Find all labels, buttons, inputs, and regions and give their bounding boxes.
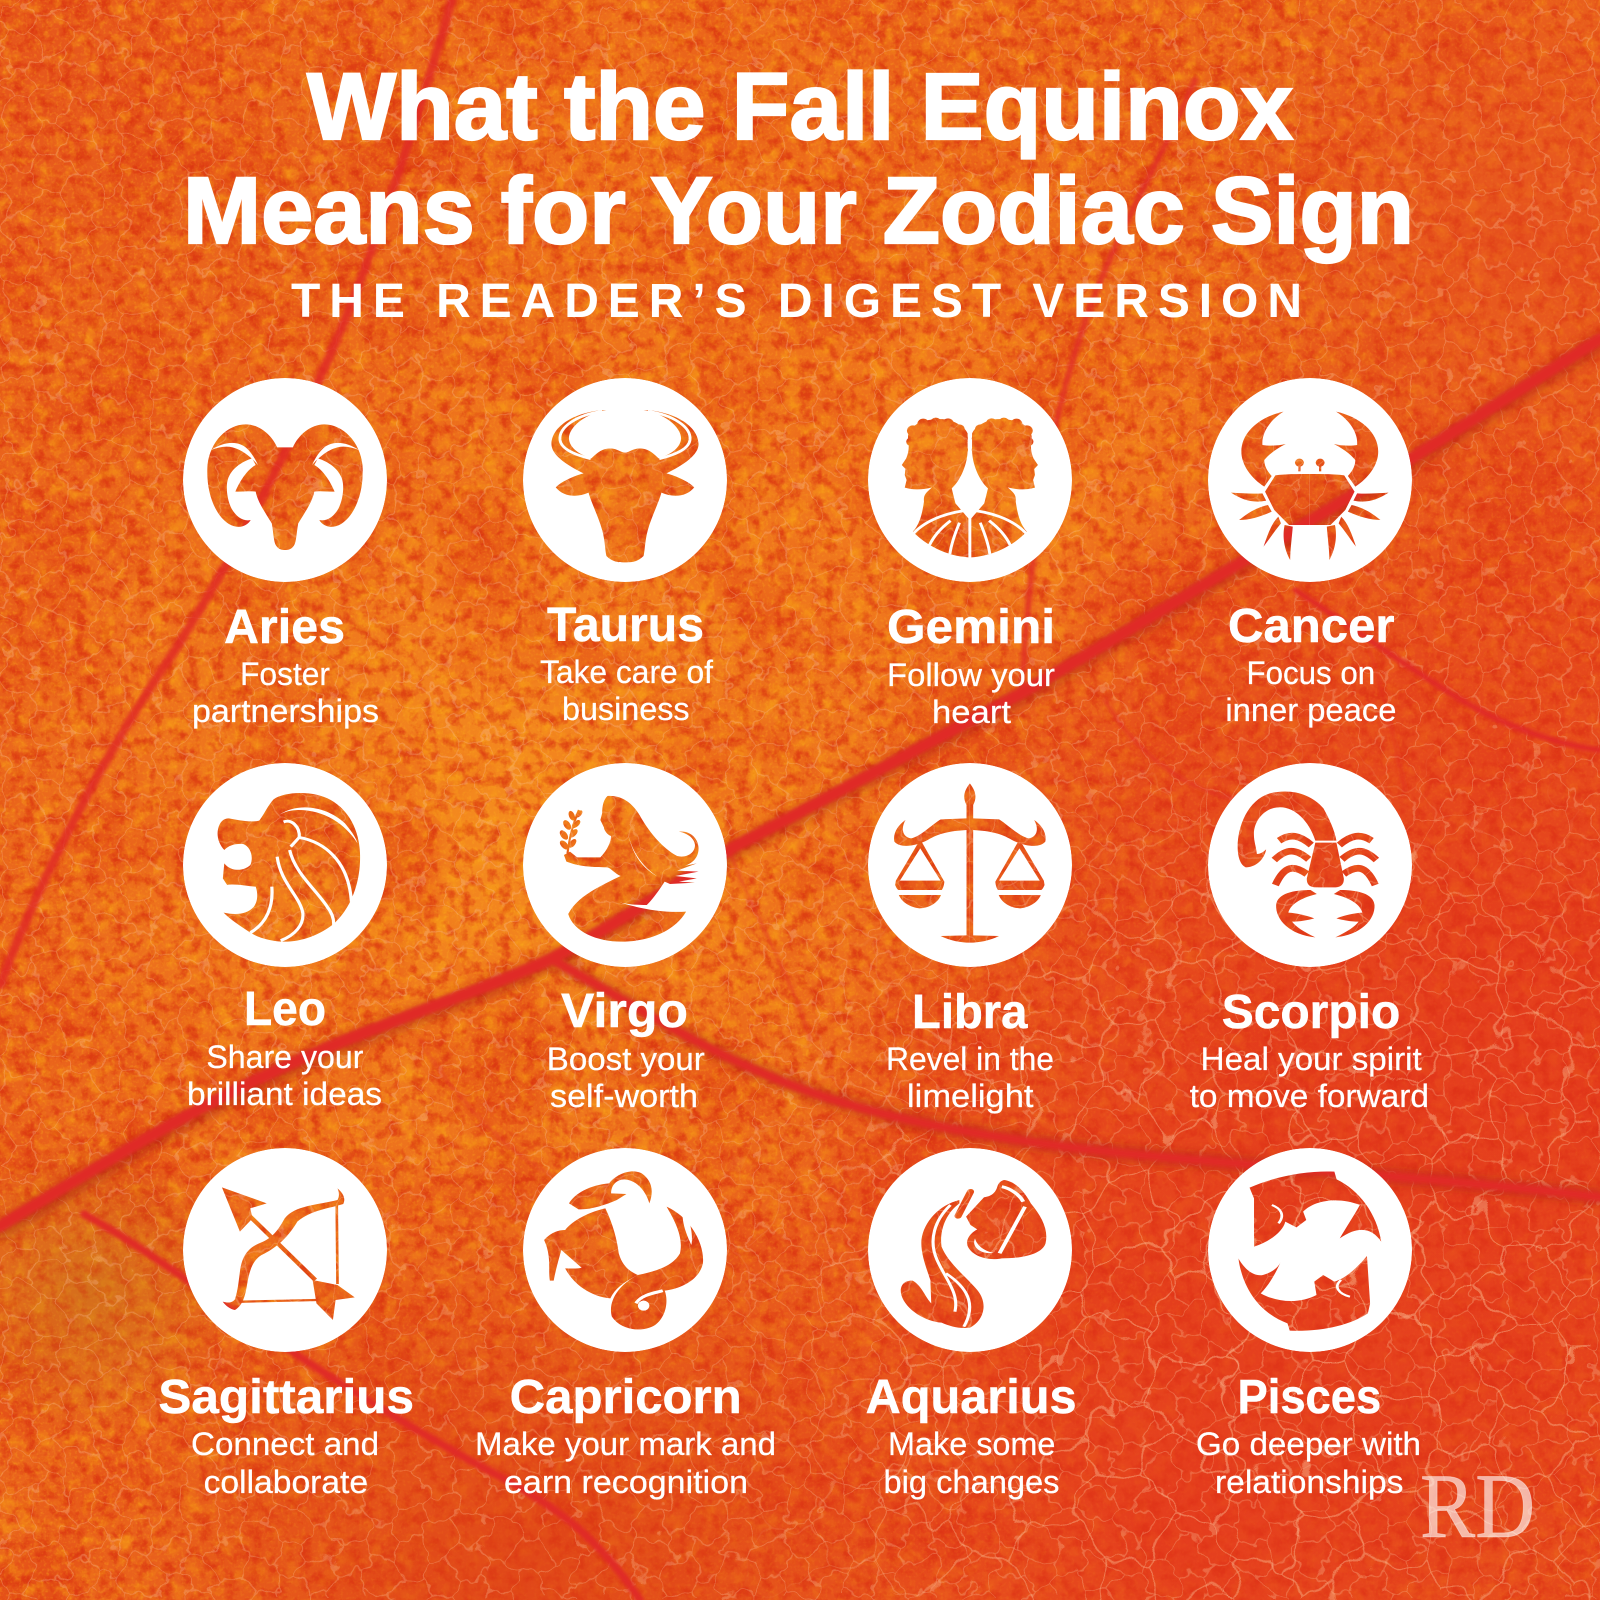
text: Aries message: Foster: [240, 656, 330, 692]
name: Cancer: Cancer: [1228, 600, 1394, 653]
text: Taurus message: [540, 654, 713, 727]
panel: Pisces: [1196, 1148, 1421, 1500]
text: Aries message: partnerships: [192, 693, 379, 729]
text: Virgo message: self-worth: [550, 1078, 698, 1114]
name: Taurus: Taurus: [547, 599, 704, 652]
text: Leo message: Share your: [206, 1039, 364, 1075]
icon: ram badge: [183, 378, 387, 582]
text: Leo message: brilliant ideas: [187, 1076, 382, 1112]
panel: Taurus: [523, 378, 727, 727]
panel: Libra: [868, 763, 1072, 1114]
name: Scorpio: Scorpio: [1222, 986, 1400, 1039]
panel: Capricorn: [475, 1148, 776, 1500]
icon: scales badge: [868, 763, 1072, 967]
title: Means for Your Zodiac Sign: [183, 158, 1414, 264]
text: Sagittarius message: Connect and: [191, 1426, 379, 1462]
text: Libra message: [886, 1041, 1054, 1114]
panel: Scorpio: [1190, 763, 1429, 1114]
icon: twins badge: [868, 378, 1072, 582]
text: Gemini message: [887, 657, 1055, 730]
text: Aquarius message: Make some: [888, 1426, 1055, 1462]
text: Cancer message: [1225, 655, 1396, 728]
name: Aries: Aries: [224, 601, 345, 654]
text: Gemini message: heart: [932, 694, 1011, 730]
text: Leo message: [187, 1039, 382, 1112]
name: Pisces: Pisces: [1238, 1371, 1381, 1424]
vein shadows: [0, 342, 1600, 1232]
name: Virgo: Virgo: [561, 985, 688, 1038]
text: Sagittarius message: collaborate: [204, 1464, 368, 1500]
icon: bull badge: [523, 378, 727, 582]
name: Gemini: Gemini: [887, 601, 1055, 654]
text: Cancer message: Focus on: [1246, 655, 1375, 691]
icon: bow and arrow badge: [183, 1148, 387, 1352]
name: Sagittarius: Sagittarius: [158, 1371, 414, 1424]
text: Taurus message: Take care of: [540, 654, 713, 690]
panel: Gemini: [868, 378, 1072, 730]
icon: scorpion badge: [1208, 763, 1412, 967]
text: Virgo message: [547, 1041, 705, 1114]
text: Scorpio message: [1190, 1041, 1429, 1114]
panel: Leo: [183, 763, 387, 1112]
panel: Sagittarius: [158, 1148, 414, 1500]
text: Aries message: [192, 656, 379, 729]
name: Leo: Leo: [244, 983, 326, 1036]
text: Libra message: Revel in the: [886, 1041, 1054, 1077]
title: What the Fall Equinox: [307, 54, 1293, 160]
text: Taurus message: business: [562, 691, 690, 727]
subtitle: THE READER’S DIGEST VERSION: [291, 275, 1302, 328]
panel: Virgo: [523, 763, 727, 1114]
icon: fish badge: [1208, 1148, 1412, 1352]
icon: lion badge: [183, 763, 387, 967]
text: Aquarius message: [884, 1426, 1060, 1500]
text: Pisces message: [1196, 1426, 1421, 1500]
text: Gemini message: Follow your: [887, 657, 1055, 693]
text: Cancer message: inner peace: [1225, 692, 1396, 728]
text: Sagittarius message: [191, 1426, 379, 1500]
icon: water bearer badge: [868, 1148, 1072, 1352]
text: Scorpio message: Heal your spirit: [1201, 1041, 1422, 1077]
name: Aquarius: Aquarius: [866, 1371, 1077, 1424]
logo: RD: RD: [1420, 1455, 1535, 1557]
panel: Cancer: [1208, 378, 1412, 728]
text: Capricorn message: earn recognition: [504, 1464, 748, 1500]
text: Capricorn message: [475, 1426, 776, 1500]
icon: maiden badge: [523, 763, 727, 967]
text: Aquarius message: big changes: [884, 1464, 1060, 1500]
text: Libra message: limelight: [907, 1078, 1034, 1114]
title: [183, 54, 1414, 264]
text: Pisces message: Go deeper with: [1196, 1426, 1421, 1462]
text: Pisces message: relationships: [1215, 1464, 1403, 1500]
text: Capricorn message: Make your mark and: [475, 1426, 776, 1462]
name: Libra: Libra: [912, 986, 1028, 1039]
name: Capricorn: Capricorn: [510, 1371, 742, 1424]
icon: sea-goat badge: [523, 1148, 727, 1352]
text: Virgo message: Boost your: [547, 1041, 705, 1077]
panel: Aries: [183, 378, 387, 729]
panel: Aquarius: [866, 1148, 1077, 1500]
text: Scorpio message: to move forward: [1190, 1078, 1429, 1114]
icon: crab badge: [1208, 378, 1412, 582]
